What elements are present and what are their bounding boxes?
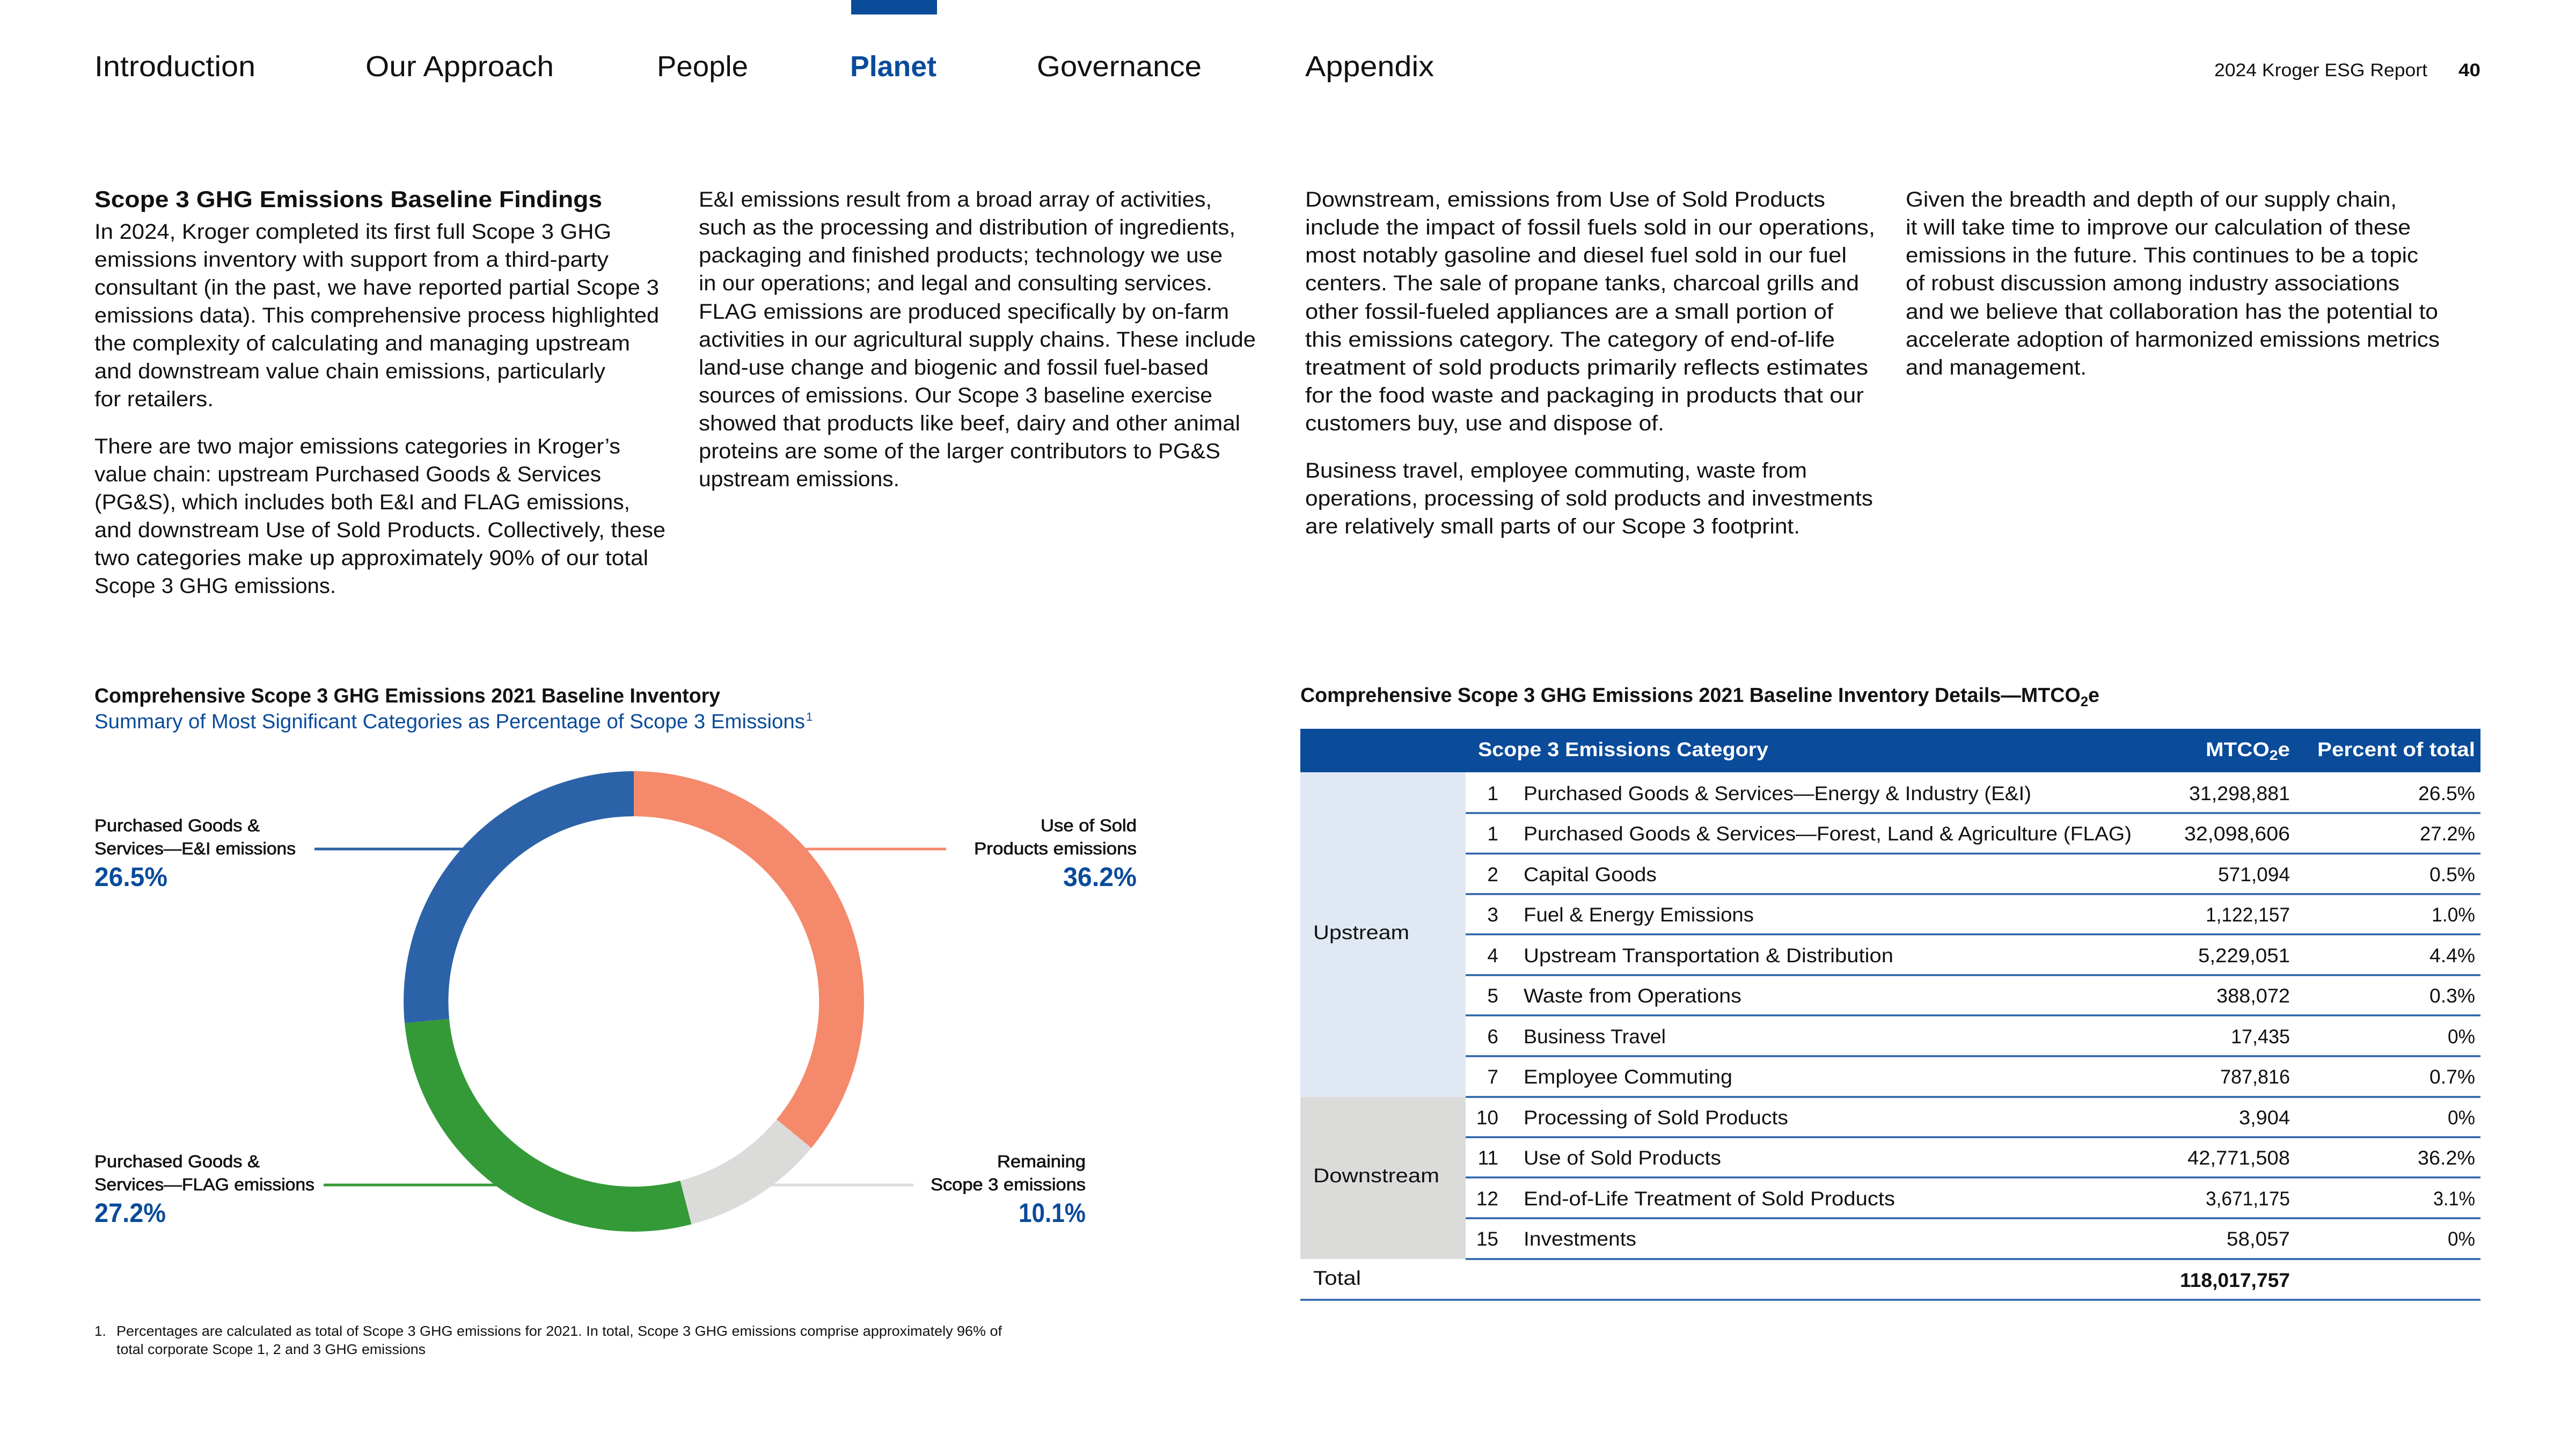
row 11: 36.2% xyxy=(2418,1147,2475,1169)
downstream group xyxy=(1300,1097,1466,1259)
text column 3: customers buy, use and dispose of. xyxy=(1305,412,1664,435)
callout: remaining scope 3 xyxy=(931,1152,1086,1228)
navigation bar: Planet xyxy=(850,50,936,83)
text column 3: include the impact of fossil fuels sold in our operations, xyxy=(1305,216,1875,239)
row 10: Processing of Sold Products xyxy=(1524,1107,1788,1129)
segment: use of sold products 36.2% xyxy=(634,771,864,1148)
text column 3: operations, processing of sold products and investments xyxy=(1305,487,1873,510)
row 6: Business Travel xyxy=(1524,1026,1666,1048)
row 5: 388,072 xyxy=(2216,985,2290,1007)
navigation bar: Introduction xyxy=(94,50,255,83)
callout: FLAG emissions: Purchased Goods & xyxy=(94,1152,260,1171)
text column 4: of robust discussion among industry associations xyxy=(1906,272,2399,295)
row 11 xyxy=(1478,1147,2475,1169)
text column 1: emissions data). This comprehensive process highlighted xyxy=(94,304,659,327)
table header: 2 xyxy=(2270,747,2278,763)
table heading: e xyxy=(2088,684,2099,707)
text column 1: and downstream Use of Sold Products. Collectively, these xyxy=(94,518,665,542)
total row: Total xyxy=(1313,1267,1361,1289)
text column 1: In 2024, Kroger completed its first full Scope 3 GHG xyxy=(94,220,611,244)
text column 2: land-use change and biogenic and fossil fuel-based xyxy=(699,356,1209,379)
text column 2: in our operations; and legal and consulting services. xyxy=(699,272,1212,295)
report name and page number: 40 xyxy=(2458,60,2480,80)
text column 1: consultant (in the past, we have reported partial Scope 3 xyxy=(94,276,659,299)
table heading: Comprehensive Scope 3 GHG Emissions 2021 Baseline Inventory Details—MTCO xyxy=(1300,684,2088,707)
row 15 xyxy=(1476,1228,2475,1250)
text column 3: treatment of sold products primarily reflects estimates xyxy=(1305,356,1868,379)
row 7: 787,816 xyxy=(2220,1066,2290,1088)
text column 3: are relatively small parts of our Scope 3 footprint. xyxy=(1305,515,1800,538)
row 3: 1,122,157 xyxy=(2206,904,2290,926)
table heading: 2 xyxy=(2081,693,2088,709)
row 15: 58,057 xyxy=(2227,1228,2290,1250)
row 12: End-of-Life Treatment of Sold Products xyxy=(1524,1188,1895,1210)
row 1 E&I: 1 xyxy=(1487,782,1498,804)
text column 1 xyxy=(94,187,665,598)
callout: use of sold products: 36.2% xyxy=(1063,862,1137,892)
total row: 118,017,757 xyxy=(2180,1269,2290,1291)
row 1 FLAG xyxy=(1487,823,2475,845)
row 3: 1.0% xyxy=(2432,904,2475,926)
text column 2: showed that products like beef, dairy and other animal xyxy=(699,412,1240,435)
segment: FLAG 27.2% xyxy=(405,1019,691,1232)
text column 4: accelerate adoption of harmonized emissions metrics xyxy=(1906,328,2440,352)
segment: remaining scope 3 10.1% xyxy=(680,1119,811,1224)
row 1 FLAG: 27.2% xyxy=(2420,823,2475,845)
text column 3: this emissions category. The category of end-of-life xyxy=(1305,328,1835,352)
row 15: Investments xyxy=(1524,1228,1636,1250)
callout: remaining scope 3: Remaining xyxy=(997,1152,1086,1171)
text column 2: such as the processing and distribution of ingredients, xyxy=(699,216,1235,239)
table header: MTCO xyxy=(2206,738,2264,760)
row 10 xyxy=(1476,1107,2475,1129)
footnote: 1. xyxy=(94,1323,106,1339)
text column 3: Business travel, employee commuting, waste from xyxy=(1305,459,1807,482)
downstream group: Downstream xyxy=(1313,1165,1439,1187)
callout: use of sold products: Use of Sold xyxy=(1041,816,1137,835)
chart heading: Summary of Most Significant Categories as Percentage of Scope 3 Emissions xyxy=(94,711,805,733)
row 12: 12 xyxy=(1476,1188,1498,1210)
callout: FLAG emissions: Services—FLAG emissions xyxy=(94,1175,314,1194)
donut chart xyxy=(314,771,946,1232)
navigation bar: Our Approach xyxy=(365,50,554,83)
text column 4: it will take time to improve our calculation of these xyxy=(1906,216,2411,239)
row 6 xyxy=(1487,1026,2475,1048)
upstream group: Upstream xyxy=(1313,921,1409,943)
text column 4: and we believe that collaboration has the potential to xyxy=(1906,300,2438,324)
text column 4: and management. xyxy=(1906,356,2087,379)
leader lines xyxy=(314,849,946,1185)
row 12: 3,671,175 xyxy=(2206,1188,2290,1210)
text column 1: the complexity of calculating and managing upstream xyxy=(94,332,630,355)
row 6: 17,435 xyxy=(2231,1026,2290,1048)
table header: e xyxy=(2278,738,2290,760)
active tab marker xyxy=(851,0,937,14)
row 5: 5 xyxy=(1487,985,1498,1007)
row 1 FLAG: 32,098,606 xyxy=(2184,823,2290,845)
row 6: 0% xyxy=(2448,1026,2475,1048)
text column 2: FLAG emissions are produced specifically by on-farm xyxy=(699,300,1229,324)
report name and page number: 2024 Kroger ESG Report xyxy=(2214,60,2428,80)
row 11: 42,771,508 xyxy=(2187,1147,2290,1169)
navigation bar: Governance xyxy=(1037,50,1202,83)
text column 3: other fossil-fueled appliances are a small portion of xyxy=(1305,300,1834,324)
row 1 FLAG: 1 xyxy=(1487,823,1498,845)
emissions table xyxy=(1300,729,2480,1300)
chart heading: Comprehensive Scope 3 GHG Emissions 2021 Baseline Inventory xyxy=(94,685,720,707)
navigation bar: People xyxy=(657,50,748,83)
row 7 xyxy=(1487,1066,2475,1088)
callout: FLAG emissions: 27.2% xyxy=(94,1198,166,1228)
row 4 xyxy=(1487,945,2475,967)
callout: use of sold products xyxy=(974,816,1137,892)
text column 1: emissions inventory with support from a third-party xyxy=(94,248,609,272)
row 6: 6 xyxy=(1487,1026,1498,1048)
row 1 E&I xyxy=(1487,782,2475,804)
text column 3: most notably gasoline and diesel fuel sold in our fuel xyxy=(1305,244,1847,267)
text column 2: E&I emissions result from a broad array of activities, xyxy=(699,188,1212,211)
row 5 xyxy=(1487,985,2475,1007)
text column 3 xyxy=(1305,188,1875,538)
text column 1: Scope 3 GHG emissions. xyxy=(94,574,336,598)
row 3: 3 xyxy=(1487,904,1498,926)
row 1 FLAG: Purchased Goods & Services—Forest, Land & Agriculture (FLAG) xyxy=(1524,823,2132,845)
text column 3: for the food waste and packaging in products that our xyxy=(1305,384,1864,407)
footnote: Percentages are calculated as total of Scope 3 GHG emissions for 2021. In total, Scope 3 GHG emissions comprise approximately 96% of xyxy=(116,1323,1002,1339)
row 4: 4.4% xyxy=(2429,945,2475,967)
callout: E&I emissions: Purchased Goods & xyxy=(94,816,260,835)
chart heading: 1 xyxy=(806,710,813,723)
chart heading xyxy=(94,685,813,733)
row 15: 15 xyxy=(1476,1228,1498,1250)
row 4: 5,229,051 xyxy=(2198,945,2290,967)
callout: FLAG emissions xyxy=(94,1152,314,1228)
row 11: 11 xyxy=(1478,1147,1498,1169)
row 10: 10 xyxy=(1476,1107,1498,1129)
callout: remaining scope 3: Scope 3 emissions xyxy=(931,1175,1086,1194)
navigation bar: Appendix xyxy=(1305,50,1434,83)
text column 4 xyxy=(1906,188,2440,379)
callout: remaining scope 3: 10.1% xyxy=(1019,1198,1086,1228)
row 2: 2 xyxy=(1487,863,1498,885)
callout: E&I emissions: Services—E&I emissions xyxy=(94,839,296,858)
text column 1: for retailers. xyxy=(94,387,214,411)
row 3 xyxy=(1487,904,2475,926)
row 2 xyxy=(1487,863,2475,885)
row 12 xyxy=(1476,1188,2475,1210)
row 3: Fuel & Energy Emissions xyxy=(1524,904,1754,926)
text column 1: There are two major emissions categories in Kroger’s xyxy=(94,435,620,458)
table header: Percent of total xyxy=(2317,738,2475,760)
row 15: 0% xyxy=(2448,1228,2475,1250)
row 5: 0.3% xyxy=(2429,985,2475,1007)
callout: E&I emissions xyxy=(94,816,296,892)
callout: use of sold products: Products emissions xyxy=(974,839,1137,858)
text column 1: two categories make up approximately 90% of our total xyxy=(94,546,648,570)
text column 3: Downstream, emissions from Use of Sold Products xyxy=(1305,188,1825,211)
row 7: Employee Commuting xyxy=(1524,1066,1732,1088)
row 4: 4 xyxy=(1487,945,1498,967)
row 11: Use of Sold Products xyxy=(1524,1147,1721,1169)
callout: E&I emissions: 26.5% xyxy=(94,862,167,892)
text column 1: (PG&S), which includes both E&I and FLAG emissions, xyxy=(94,491,630,514)
row 1 E&I: Purchased Goods & Services—Energy & Industry (E&I) xyxy=(1524,782,2031,804)
row 2: 571,094 xyxy=(2218,863,2290,885)
row 12: 3.1% xyxy=(2433,1188,2475,1210)
heading: Scope 3 GHG Emissions Baseline Findings xyxy=(94,187,602,213)
row 2: 0.5% xyxy=(2429,863,2475,885)
text column 4: emissions in the future. This continues to be a topic xyxy=(1906,244,2418,267)
row 7: 7 xyxy=(1487,1066,1498,1088)
text column 4: Given the breadth and depth of our supply chain, xyxy=(1906,188,2397,211)
footnote: total corporate Scope 1, 2 and 3 GHG emissions xyxy=(116,1341,426,1357)
row 10: 0% xyxy=(2448,1107,2475,1129)
row 2: Capital Goods xyxy=(1524,863,1657,885)
navigation bar xyxy=(94,0,1434,83)
total row xyxy=(1313,1267,2290,1291)
upstream group xyxy=(1300,772,1466,1097)
row 1 E&I: 31,298,881 xyxy=(2189,782,2290,804)
table header: Scope 3 Emissions Category xyxy=(1478,738,1768,760)
row 5: Waste from Operations xyxy=(1524,985,1741,1007)
row 1 E&I: 26.5% xyxy=(2418,782,2475,804)
footnote xyxy=(94,1323,1002,1357)
text column 2: activities in our agricultural supply chains. These include xyxy=(699,328,1256,352)
segment: E&I 26.5% xyxy=(404,771,634,1023)
row 10: 3,904 xyxy=(2239,1107,2290,1129)
text column 2: sources of emissions. Our Scope 3 baseline exercise xyxy=(699,384,1212,407)
text column 2: proteins are some of the larger contributors to PG&S xyxy=(699,440,1220,463)
text column 3: centers. The sale of propane tanks, charcoal grills and xyxy=(1305,272,1859,295)
text column 2 xyxy=(699,188,1256,491)
text column 1: value chain: upstream Purchased Goods & Services xyxy=(94,463,601,486)
row 7: 0.7% xyxy=(2429,1066,2475,1088)
table header xyxy=(1300,729,2480,772)
text column 2: packaging and finished products; technology we use xyxy=(699,244,1223,267)
text column 2: upstream emissions. xyxy=(699,467,899,491)
text column 1: and downstream value chain emissions, particularly xyxy=(94,360,605,383)
row 4: Upstream Transportation & Distribution xyxy=(1524,945,1893,967)
